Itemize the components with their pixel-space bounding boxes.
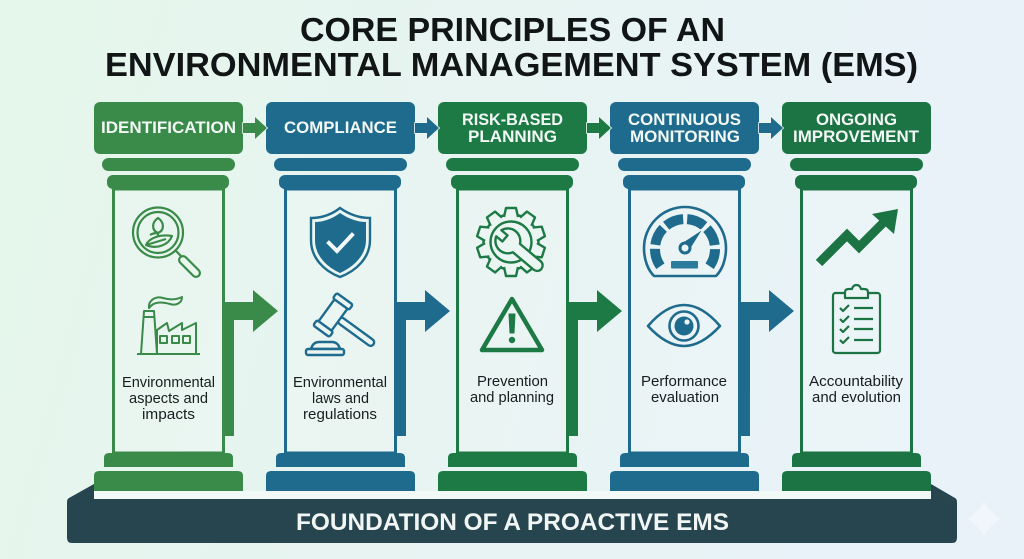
icon: gear with wrench [477, 208, 549, 278]
heading [628, 110, 741, 146]
description: laws and [312, 391, 369, 407]
description: evaluation [651, 390, 719, 406]
title [105, 12, 918, 84]
heading: MONITORING [630, 127, 740, 146]
arrow: risk-based planning to continuous monitoring [587, 117, 611, 139]
heading: CONTINUOUS [628, 110, 741, 129]
big arrow: pillar one to two [222, 290, 278, 436]
icon: speedometer [644, 207, 726, 276]
foundation base [67, 484, 957, 543]
big arrow: pillar two to three [394, 290, 450, 436]
description: Accountability [809, 374, 904, 390]
icon: sparkle [967, 501, 1001, 536]
arrow: identification to compliance [243, 117, 267, 139]
arrow: compliance to risk-based planning [415, 117, 439, 139]
description: and planning [470, 390, 554, 406]
description: and evolution [812, 390, 901, 406]
description [641, 374, 727, 406]
description: Environmental [122, 375, 215, 391]
description [470, 374, 554, 406]
icon: rising trend arrow [819, 209, 898, 263]
arrow: continuous monitoring to ongoing improvement [759, 117, 783, 139]
heading: ONGOING [816, 110, 897, 129]
pillar structure [94, 102, 243, 491]
big arrow: pillar four to five [738, 290, 794, 436]
title: CORE PRINCIPLES OF AN [300, 12, 725, 49]
icon: clipboard checklist [833, 285, 880, 353]
icon: gavel [306, 293, 385, 361]
foundation label: FOUNDATION OF A PROACTIVE EMS [296, 509, 729, 536]
icon: warning triangle [482, 299, 542, 350]
panel: risk-based planning pillar [438, 102, 587, 491]
description: aspects and [129, 391, 208, 407]
heading: IMPROVEMENT [793, 127, 920, 146]
panel: compliance pillar [266, 102, 415, 491]
description: impacts [142, 407, 195, 423]
icon: factory [137, 297, 200, 354]
heading: PLANNING [468, 127, 557, 146]
title: ENVIRONMENTAL MANAGEMENT SYSTEM (EMS) [105, 47, 918, 84]
heading [793, 110, 920, 146]
panel: identification pillar [94, 102, 243, 491]
description: Environmental [293, 375, 387, 391]
heading: IDENTIFICATION [101, 118, 236, 137]
pillar structure [782, 102, 931, 491]
description: Performance [641, 374, 727, 390]
icon: eye [648, 305, 720, 346]
pillar structure [266, 102, 415, 491]
heading: COMPLIANCE [284, 118, 397, 137]
panel: continuous monitoring pillar [610, 102, 759, 491]
panel: ongoing improvement pillar [782, 102, 931, 491]
heading [462, 110, 563, 146]
pillar structure [610, 102, 759, 491]
description [293, 375, 387, 423]
big arrow: pillar three to four [566, 290, 622, 436]
icon: shield [311, 208, 370, 277]
icon: magnifier with leaf [133, 208, 196, 273]
description [809, 374, 904, 406]
description [122, 375, 215, 423]
description: regulations [303, 407, 377, 423]
description: Prevention [477, 374, 548, 390]
heading: RISK-BASED [462, 110, 563, 129]
pillar structure [438, 102, 587, 491]
